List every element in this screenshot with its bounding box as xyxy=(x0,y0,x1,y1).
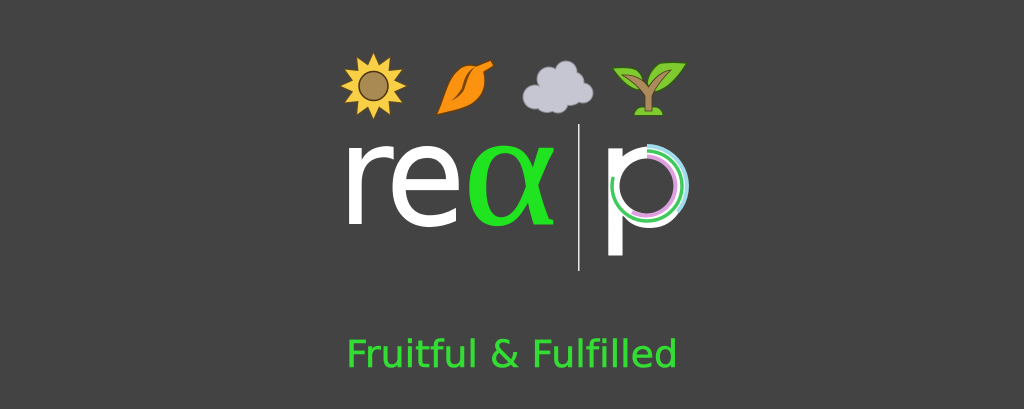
tagline: Fruitful & Fulfilled xyxy=(346,333,678,376)
logo letter: alpha: α xyxy=(463,77,557,260)
logo letter: r: r xyxy=(336,95,394,257)
logo letter: e: e xyxy=(386,96,465,258)
logo letter: p with rings: p xyxy=(594,95,694,260)
vertical divider xyxy=(578,124,580,271)
icon: grey cloud xyxy=(522,60,594,114)
icon: orange leaf xyxy=(436,60,494,115)
icon: green sprout xyxy=(612,62,687,116)
icon: sunflower xyxy=(340,52,408,120)
